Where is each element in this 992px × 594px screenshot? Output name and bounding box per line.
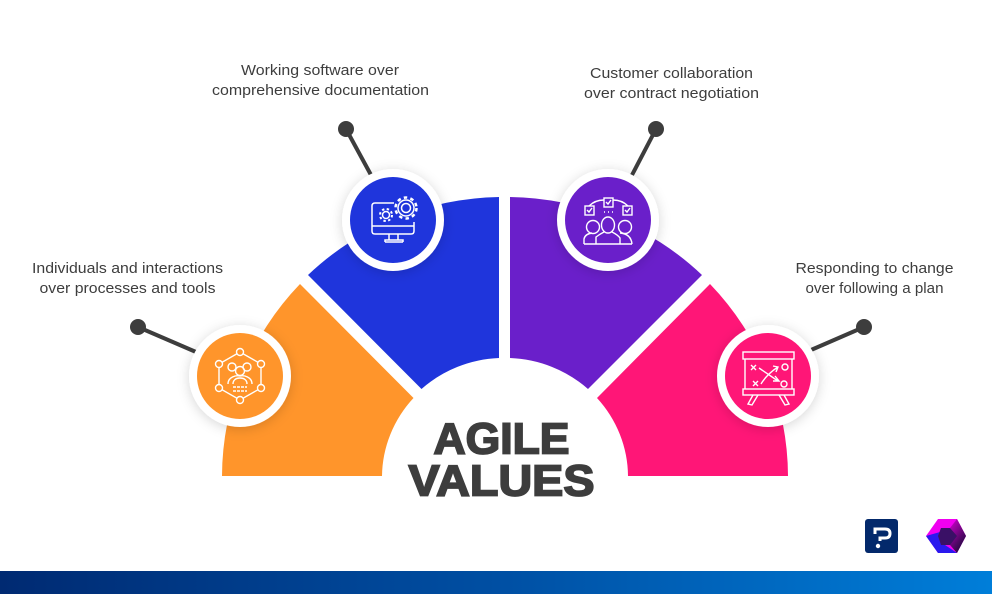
connector: pink pin	[811, 319, 872, 350]
segment: orange	[222, 284, 414, 476]
label: individuals and interactions: over processes and tools	[40, 280, 216, 297]
title: AGILE	[434, 414, 570, 464]
label: individuals and interactions: Individuals and interactions	[32, 260, 223, 277]
segment: pink	[597, 284, 788, 476]
label: customer collaboration: Customer collaboration	[590, 65, 753, 82]
title	[408, 414, 594, 506]
connector: orange pin	[130, 319, 196, 352]
title: VALUES	[408, 456, 594, 506]
connector: blue pin	[338, 121, 371, 175]
logo: P question mark	[865, 519, 898, 553]
label: responding to change: over following a plan	[806, 280, 944, 297]
connector: purple pin	[632, 121, 664, 175]
icon: team with checklists	[557, 169, 659, 271]
icon: people network	[189, 325, 291, 427]
label: responding to change: Responding to change	[796, 260, 954, 277]
label: customer collaboration: over contract negotiation	[584, 85, 759, 102]
icon: monitor with gears	[342, 169, 444, 271]
label: working software: comprehensive documentation	[212, 82, 429, 99]
logo: hexagon	[926, 519, 966, 553]
label: working software: Working software over	[241, 62, 399, 79]
segment: blue	[308, 197, 499, 389]
segment: purple	[510, 197, 702, 389]
icon: strategy board	[717, 325, 819, 427]
footer bar	[0, 571, 992, 594]
